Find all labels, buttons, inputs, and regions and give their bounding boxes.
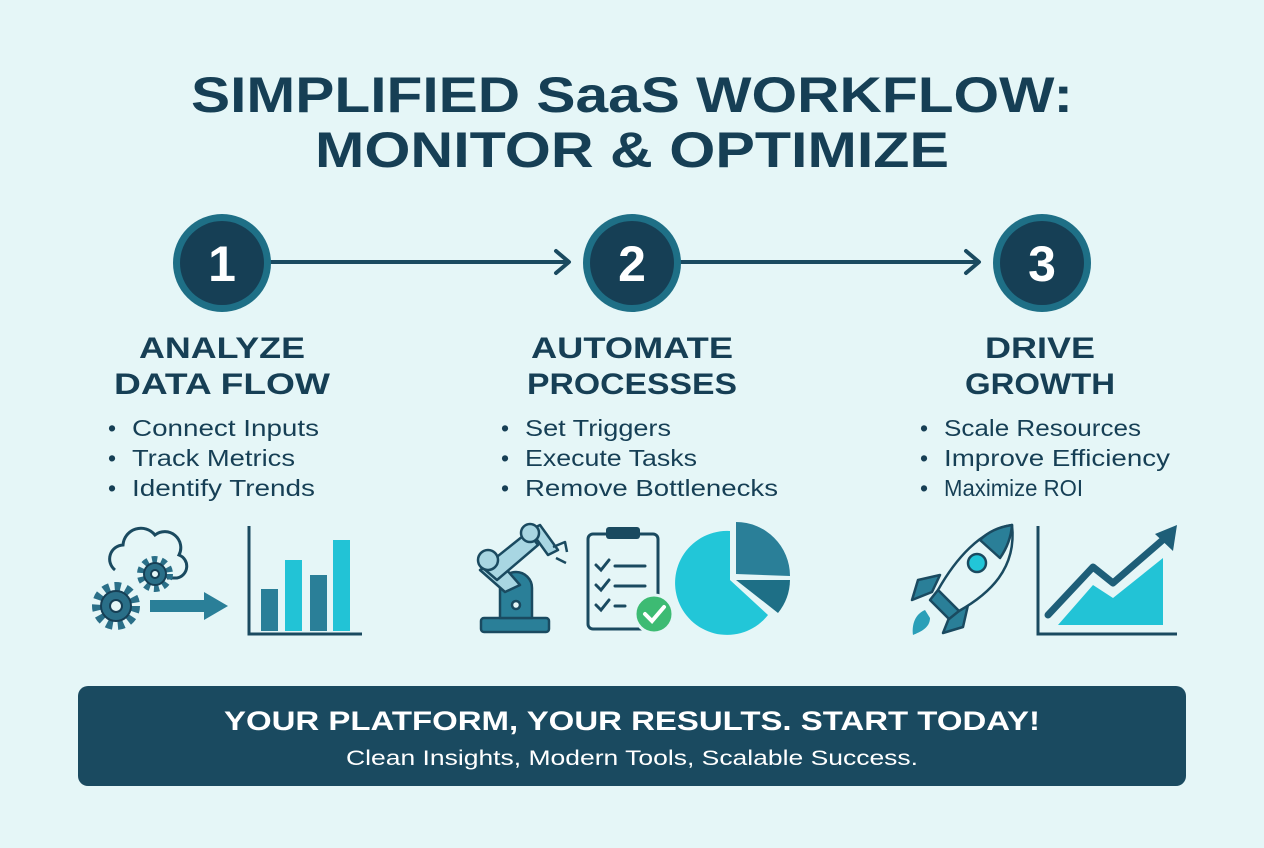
bullets: column 2: • — [501, 415, 509, 441]
bullets: column 1: • — [108, 475, 116, 501]
step 2 circle: 2 — [618, 236, 646, 292]
heading: analyze data flow — [114, 332, 331, 401]
bullets: column 2: • — [501, 445, 509, 471]
step 2 circle — [583, 214, 681, 312]
bullets: column 3: • — [920, 445, 928, 471]
chart: growth line chart — [1038, 525, 1177, 634]
icon: robot arm — [478, 524, 567, 632]
heading: automate processes: AUTOMATE — [531, 332, 733, 365]
heading: analyze data flow: DATA FLOW — [114, 368, 331, 401]
bullets: column 3: Maximize ROI — [944, 475, 1083, 501]
banner: call to action: Clean Insights, Modern Tools, Scalable Success. — [346, 747, 918, 770]
bullets: column 2: Set Triggers — [525, 415, 671, 441]
icon: cloud and gears with arrow — [97, 528, 228, 625]
banner: call to action — [78, 686, 1186, 786]
bullets: column 2 — [501, 415, 778, 501]
icon: checklist clipboard — [588, 527, 673, 633]
heading: drive growth: GROWTH — [965, 368, 1115, 401]
step 1 circle — [173, 214, 271, 312]
bullets: column 1: • — [108, 445, 116, 471]
bullets: column 2: Execute Tasks — [525, 445, 697, 471]
arrow: step 1 to 2 — [270, 251, 569, 273]
step 3 circle — [993, 214, 1091, 312]
bullets: column 3: Scale Resources — [944, 415, 1141, 441]
bullets: column 1: Identify Trends — [132, 475, 315, 501]
heading: analyze data flow: ANALYZE — [139, 332, 305, 365]
chart: bar chart — [249, 526, 362, 634]
bullets: column 2: • — [501, 475, 509, 501]
heading: automate processes — [527, 332, 737, 401]
bullets: column 3: • — [920, 475, 928, 501]
bullets: column 1: • — [108, 415, 116, 441]
bullets: column 3: Improve Efficiency — [944, 445, 1171, 471]
heading: drive growth: DRIVE — [985, 332, 1095, 365]
bullets: column 1 — [108, 415, 319, 501]
bullets: column 1: Track Metrics — [132, 445, 295, 471]
heading: automate processes: PROCESSES — [527, 368, 737, 401]
heading: drive growth — [965, 332, 1115, 401]
bullets: column 3: • — [920, 415, 928, 441]
step 1 circle: 1 — [208, 236, 236, 292]
icon: rocket — [912, 525, 1013, 635]
bullets: column 1: Connect Inputs — [132, 415, 319, 441]
title: SIMPLIFIED SaaS WORKFLOW: — [191, 67, 1073, 123]
arrow: step 2 to 3 — [680, 251, 979, 273]
title: MONITOR & OPTIMIZE — [315, 122, 949, 178]
chart: pie chart — [675, 522, 790, 635]
banner: call to action: YOUR PLATFORM, YOUR RESULTS. START TODAY! — [224, 706, 1040, 736]
bullets: column 2: Remove Bottlenecks — [525, 475, 778, 501]
step 3 circle: 3 — [1028, 236, 1056, 292]
title — [191, 67, 1073, 178]
bullets: column 3 — [920, 415, 1171, 501]
